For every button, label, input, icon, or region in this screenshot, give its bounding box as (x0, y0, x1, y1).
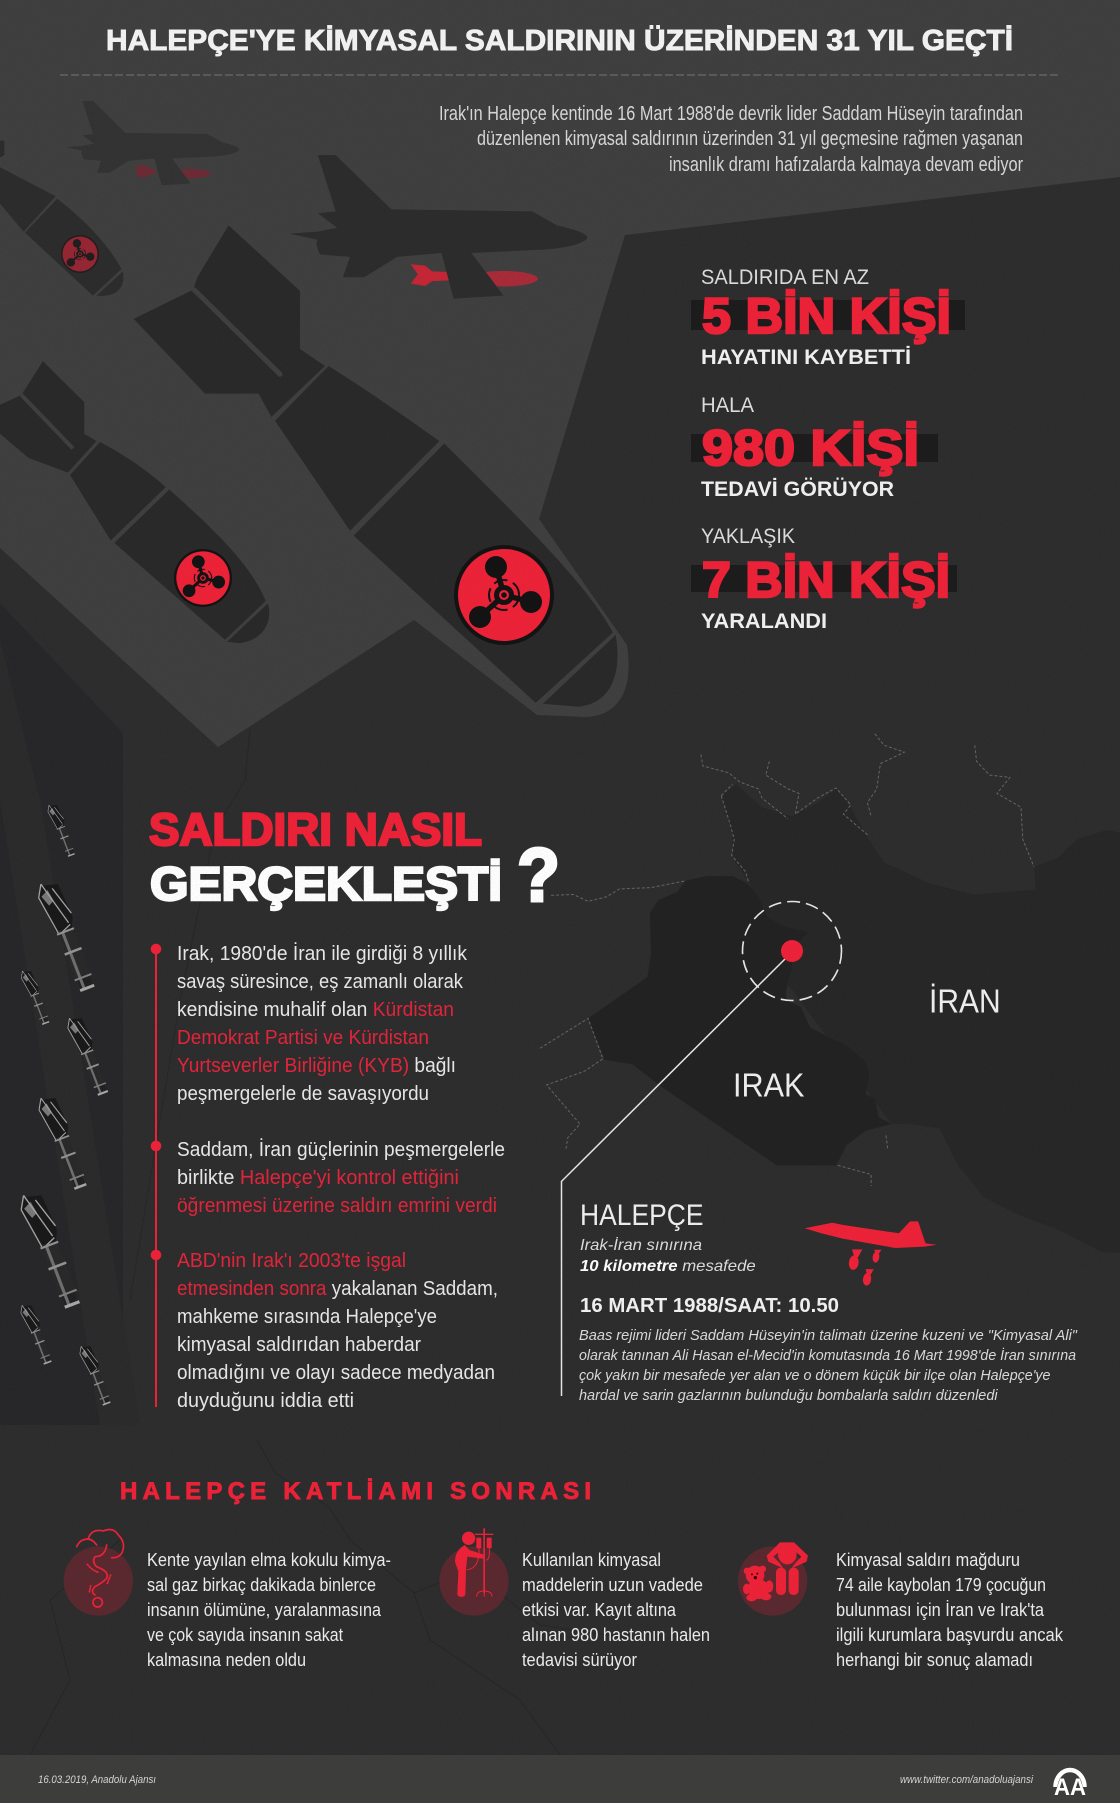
background: lighter diagonal streak (0, 640, 140, 1425)
text: column 1: sal gaz birkaç dakikada binlerce (147, 1575, 376, 1595)
map: dashed circle (742, 902, 842, 1000)
footer (0, 1755, 1120, 1803)
icon: chemical symbol small dim (61, 235, 99, 273)
Halepce info: 10 kilometre mesafede (580, 1258, 756, 1275)
icon: patient with IV drip (439, 1528, 509, 1616)
text: column 1: kalmasına neden oldu (147, 1650, 306, 1670)
stat: under treatment: TEDAVİ GÖRÜYOR (701, 478, 894, 501)
Halepce info: hardal ve sarin gazlarının bulunduğu bombalarla saldırı düzenledi (579, 1388, 998, 1404)
text block 2: öğrenmesi üzerine saldırı emrini verdi (177, 1195, 497, 1217)
text block 1 (177, 942, 468, 1105)
text block 1: savaş süresince, eş zamanlı olarak (177, 971, 464, 993)
label: Iran: İRAN (929, 982, 1001, 1020)
stat: wounded (691, 525, 957, 633)
text block 2: Saddam, İran güçlerinin peşmergelerle (177, 1138, 505, 1161)
Halepce info: HALEPÇE (580, 1199, 704, 1232)
map: Iran (721, 784, 1120, 1253)
stat: under treatment: HALA (701, 394, 754, 417)
illustration: jets and bombs (0, 101, 617, 707)
icon: crouching child and teddy (738, 1542, 808, 1616)
Halepce info: Baas rejimi lideri Saddam Hüseyin'in talimatı üzerine kuzeni ve "Kimyasal Ali" (579, 1328, 1078, 1344)
text block 3: ABD'nin Irak'ı 2003'te işgal (177, 1250, 406, 1272)
bomb: large (134, 225, 617, 707)
text block 2 (177, 1138, 505, 1217)
Halepce info: 16 MART 1988/SAAT: 10.50 (580, 1295, 839, 1317)
map: dashed borders (540, 734, 1034, 1186)
Halepce info: olarak tanınan Ali Hasan el-Mecid'in komutasında 16 Mart 1998'de İran sınırına (579, 1347, 1076, 1364)
text: column 1: ve çok sayıda insanın sakat (147, 1625, 343, 1645)
text: column 2: etkisi var. Kayıt altına (522, 1600, 677, 1620)
text: column 2: maddelerin uzun vadede (522, 1575, 703, 1595)
stat: deaths: 5 BİN KİŞİ (702, 288, 951, 344)
timeline (151, 944, 161, 1407)
bomb: top left (0, 141, 123, 296)
icon: chemical symbol medium (174, 549, 232, 607)
title: HALEPÇE'YE KİMYASAL SALDIRININ ÜZERİNDEN 31 YIL GEÇTİ (106, 24, 1013, 57)
text: column 3: ilgili kurumlara başvurdu ancak (836, 1625, 1064, 1645)
icon: chemical symbol large (454, 545, 554, 645)
text block 1: Irak, 1980'de İran ile girdiği 8 yıllık (177, 942, 468, 965)
stat: wounded: YAKLAŞIK (701, 525, 795, 548)
text: column 3: bulunması için İran ve Irak'ta (836, 1600, 1045, 1620)
text block 1: Yurtseverler Birliğine (KYB) bağlı (177, 1055, 456, 1077)
stat: wounded: YARALANDI (701, 610, 827, 633)
Halepce info: çok yakın bir mesafede yer alan ve o dönem küçük bir ilçe olan Halepçe'ye (579, 1368, 1050, 1384)
stat: wounded: 7 BİN KİŞİ (702, 552, 950, 608)
heading: how it happened: SALDIRI NASIL (149, 804, 482, 855)
stat: deaths: SALDIRIDA EN AZ (701, 266, 869, 289)
text block 3 (177, 1250, 498, 1412)
background: light beam from the top (0, 0, 1120, 747)
heading: after the massacre: HALEPÇE KATLİAMI SONRASI (120, 1478, 591, 1505)
text: column 2: alınan 980 hastanın halen (522, 1625, 710, 1645)
map: Iraq (588, 876, 892, 1165)
text block 3: olmadığını ve olayı sadece medyadan (177, 1362, 495, 1384)
text: column 1: insanın ölümüne, yaralanmasına (147, 1600, 382, 1620)
text block 1: peşmergelerle de savaşıyordu (177, 1083, 429, 1105)
text: column 2: Kullanılan kimyasal (522, 1550, 661, 1570)
text: column 3 (836, 1550, 1064, 1670)
text: column 1: Kente yayılan elma kokulu kimya- (147, 1550, 391, 1570)
background: dark left band (0, 603, 123, 1425)
text block 1: Demokrat Partisi ve Kürdistan (177, 1027, 429, 1049)
text block 1: kendisine muhalif olan Kürdistan (177, 999, 454, 1021)
label: Iraq: IRAK (733, 1066, 804, 1104)
Halepce info (579, 1199, 1078, 1404)
icon: small jet (66, 101, 240, 185)
icon: red jet with bombs (805, 1221, 937, 1287)
text block 3: etmesinden sonra yakalanan Saddam, (177, 1278, 498, 1300)
text: column 2 (522, 1550, 710, 1670)
heading: how it happened (149, 804, 560, 918)
icon: AA logo: AA (1054, 1774, 1086, 1801)
map: red dot (781, 940, 803, 962)
text: column 2: tedavisi sürüyor (522, 1650, 637, 1670)
heading: how it happened: ? (517, 833, 560, 918)
text block 3: mahkeme sırasında Halepçe'ye (177, 1306, 437, 1328)
bomb: middle left (0, 361, 269, 643)
icon: smoke question mark (64, 1530, 133, 1616)
text: column 3: herhangi bir sonuç alamadı (836, 1650, 1033, 1670)
background: cracks (30, 730, 640, 1755)
heading: how it happened: GERÇEKLEŞTİ (150, 857, 502, 910)
footer: 16.03.2019, Anadolu Ajansı (38, 1774, 156, 1786)
icon: big jet (289, 155, 587, 299)
map: location line (562, 959, 785, 1396)
text block 2: birlikte Halepçe'yi kontrol ettiğini (177, 1167, 459, 1189)
stat: under treatment (691, 394, 938, 501)
intro text: insanlık dramı hafızalarda kalmaya devam ediyor (669, 154, 1023, 176)
intro text (439, 103, 1023, 176)
stat: under treatment: 980 KİŞİ (702, 420, 919, 476)
map (540, 734, 1120, 1253)
stat: deaths: HAYATINI KAYBETTİ (701, 346, 911, 369)
text: column 3: Kimyasal saldırı mağduru (836, 1550, 1020, 1570)
text block 3: duyduğunu iddia etti (177, 1390, 354, 1412)
Halepce info: Irak-İran sınırına (580, 1235, 702, 1254)
stat: deaths (691, 266, 965, 369)
cluster bombs (17, 802, 113, 1407)
footer: www.twitter.com/anadoluajansi (900, 1774, 1033, 1786)
text: column 1 (147, 1550, 391, 1670)
text block 3: kimyasal saldırıdan haberdar (177, 1334, 421, 1356)
text: column 3: 74 aile kaybolan 179 çocuğun (836, 1575, 1046, 1595)
